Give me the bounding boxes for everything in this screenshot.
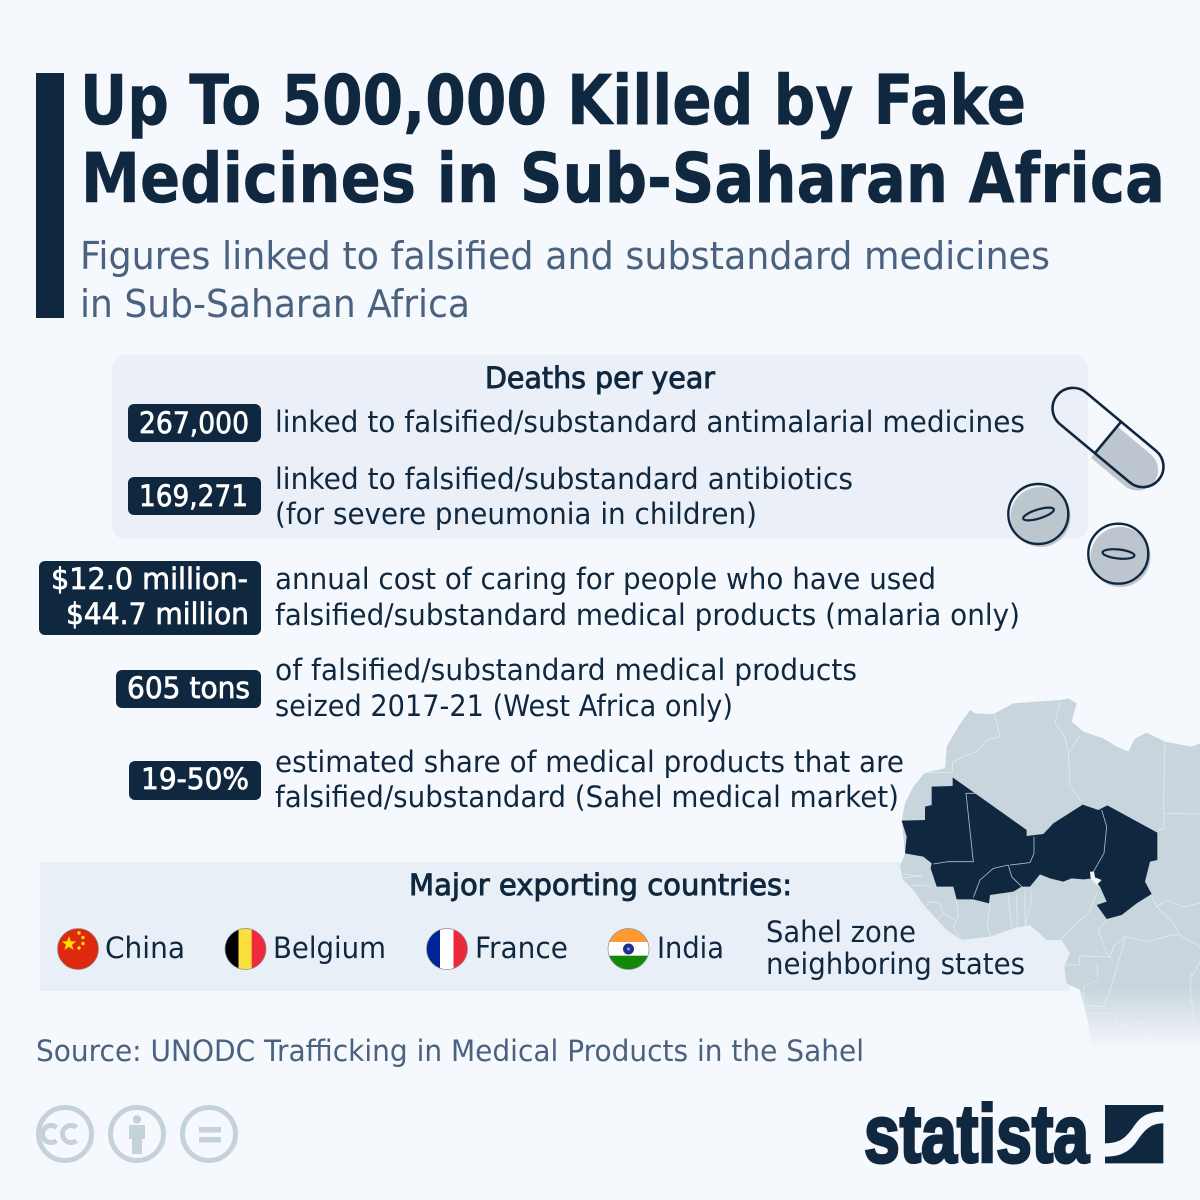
label: Belgium: Belgium — [273, 931, 386, 965]
heading: deaths per year: Deaths per year — [485, 361, 715, 395]
flag: India — [607, 928, 650, 971]
stat: 19-50% share: falsified/substandard (Sahel medical market) — [275, 780, 899, 814]
stat: 267,000 antimalarial deaths: linked to falsified/substandard antimalarial medicines — [275, 405, 1025, 439]
icon: attribution — [110, 1108, 164, 1160]
stat: 19-50% share: 19-50% — [141, 762, 249, 796]
label: China: China — [105, 931, 185, 965]
subtitle: in Sub-Saharan Africa — [80, 282, 470, 326]
stat: 19-50% share — [129, 745, 904, 814]
panel: deaths per year background — [112, 355, 1088, 539]
icon: tablet left — [1008, 484, 1070, 547]
stat: 19-50% share: estimated share of medical products that are — [275, 745, 904, 779]
stat: 605 tons seized: of falsified/substandard medical products — [275, 653, 857, 687]
stat: annual cost of care: annual cost of caring for people who have used — [275, 562, 936, 596]
panel: major exporting countries background — [40, 862, 1070, 991]
label: Sahel zone neighboring states: neighboring states — [766, 947, 1025, 981]
title: Up To 500,000 Killed by Fake — [80, 61, 1026, 141]
logo: statista wordmark: statista — [864, 1089, 1090, 1180]
icon: tablet right — [1088, 524, 1150, 587]
subtitle — [80, 234, 1050, 326]
source: Source: UNODC Trafficking in Medical Products in the Sahel — [36, 1034, 864, 1068]
icon: capsule — [1040, 380, 1172, 500]
label: Sahel zone neighboring states: Sahel zone — [766, 915, 916, 949]
stat: 169,271 antibiotic deaths — [128, 462, 853, 531]
icon: no derivatives — [182, 1108, 236, 1160]
stat: 605 tons seized: seized 2017-21 (West Africa only) — [275, 689, 733, 723]
heading: major exporting countries: Major exporting countries: — [409, 868, 792, 902]
stat: 605 tons seized: 605 tons — [127, 671, 250, 705]
label: France: France — [475, 931, 568, 965]
stat: 169,271 antibiotic deaths: linked to falsified/substandard antibiotics — [275, 462, 853, 496]
title accent bar — [36, 73, 64, 318]
stat: annual cost of care: $12.0 million- — [51, 562, 248, 596]
subtitle: Figures linked to falsified and substandard medicines — [80, 234, 1050, 278]
stat: 605 tons seized — [116, 653, 857, 723]
stat: 169,271 antibiotic deaths: (for severe pneumonia in children) — [275, 497, 757, 531]
stat: annual cost of care: falsified/substandard medical products (malaria only) — [275, 598, 1020, 632]
stat: 267,000 antimalarial deaths: 267,000 — [139, 406, 249, 440]
flag: China — [57, 928, 99, 970]
flag: Belgium — [224, 928, 268, 970]
map: Sahel zone and neighboring states — [900, 698, 1200, 1060]
stat: 169,271 antibiotic deaths: 169,271 — [139, 479, 248, 513]
flag: France — [426, 928, 468, 970]
stat: annual cost of care: $44.7 million — [66, 597, 249, 631]
logo: statista icon — [1105, 1105, 1163, 1163]
icon: creative commons — [38, 1108, 92, 1160]
label: India: India — [657, 931, 724, 965]
stat: annual cost of care — [39, 561, 1020, 635]
title — [80, 61, 1165, 219]
label: Sahel zone neighboring states — [766, 915, 1025, 981]
